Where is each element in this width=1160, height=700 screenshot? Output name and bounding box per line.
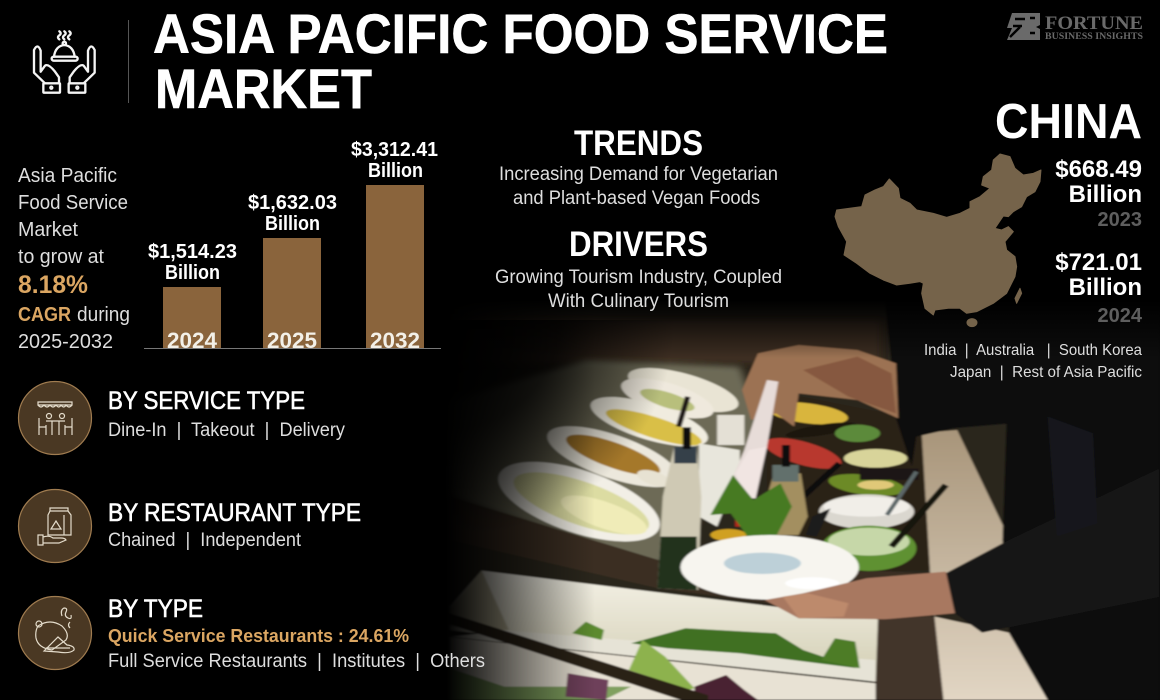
- trends and drivers: and Plant-based Vegan Foods: [513, 188, 760, 209]
- CAGR text block: to grow at: [18, 246, 104, 268]
- bar chart: [144, 139, 441, 353]
- CAGR text block: Asia Pacific: [18, 165, 117, 187]
- segment: by service type: BY SERVICE TYPE: [108, 387, 305, 415]
- logo: Fortune Business Insights: FORTUNE: [1045, 13, 1143, 34]
- other countries: Japan | Rest of Asia Pacific: [950, 364, 1142, 381]
- CAGR text block: 8.18%: [18, 271, 88, 299]
- China statistics: Billion: [1069, 274, 1142, 301]
- bar chart: $3,312.41: [351, 139, 438, 161]
- CAGR text block: Market: [18, 219, 78, 241]
- photo: salad bar buffet: [451, 311, 1160, 700]
- header icon: hands holding cloche: [34, 31, 95, 93]
- CAGR text block: during: [77, 304, 130, 326]
- bar chart: 2032: [370, 328, 420, 353]
- bar chart: $1,632.03: [248, 192, 337, 214]
- segment: by restaurant type: BY RESTAURANT TYPE: [108, 499, 361, 527]
- bar chart: $1,514.23: [148, 241, 237, 263]
- logo: Fortune Business Insights: [1007, 13, 1143, 42]
- bar chart: Billion: [265, 213, 320, 235]
- other countries: [924, 342, 1142, 381]
- logo: Fortune Business Insights: BUSINESS INSIGHTS: [1045, 32, 1143, 42]
- segment: by service type: [18, 382, 345, 454]
- China statistics: [995, 95, 1143, 327]
- title: [153, 2, 888, 120]
- bar chart: Billion: [165, 262, 220, 284]
- segment: by type: BY TYPE: [108, 595, 203, 623]
- trends and drivers: DRIVERS: [569, 225, 708, 264]
- China map: [835, 154, 1041, 327]
- China statistics: CHINA: [995, 95, 1142, 149]
- CAGR text block: 2025-2032: [18, 331, 113, 353]
- CAGR text block: CAGR: [18, 304, 71, 326]
- segment: by type: [18, 595, 485, 672]
- CAGR text block: Food Service: [18, 192, 128, 214]
- China statistics: 2023: [1098, 209, 1142, 231]
- segment: by type: Quick Service Restaurants : 24.61%: [108, 626, 409, 646]
- title: MARKET: [155, 57, 372, 120]
- segment: by restaurant type: Chained | Independent: [108, 530, 302, 551]
- trends and drivers: Increasing Demand for Vegetarian: [499, 164, 778, 185]
- China statistics: 2024: [1098, 305, 1143, 327]
- bar chart: 2024: [167, 328, 218, 353]
- trends and drivers: With Culinary Tourism: [548, 291, 729, 312]
- icon: restaurant table: [18, 382, 92, 454]
- trends and drivers: Growing Tourism Industry, Coupled: [495, 267, 782, 288]
- segment: by type: Full Service Restaurants | Institutes | Others: [108, 651, 485, 672]
- bar chart: Billion: [368, 160, 423, 182]
- icon: dish with cloche: [18, 596, 92, 670]
- other countries: India | Australia | South Korea: [924, 342, 1142, 359]
- trends and drivers: TRENDS: [574, 124, 703, 163]
- trends and drivers: [495, 124, 782, 312]
- China statistics: Billion: [1069, 181, 1142, 208]
- segment: by service type: Dine-In | Takeout | Delivery: [108, 420, 345, 441]
- segment: by restaurant type: [18, 490, 361, 562]
- icon: food bag on hand: [18, 490, 92, 562]
- bar chart: 2025: [267, 328, 317, 353]
- China statistics: $668.49: [1055, 156, 1142, 183]
- China statistics: $721.01: [1055, 249, 1142, 276]
- title: ASIA PACIFIC FOOD SERVICE: [153, 2, 888, 65]
- CAGR text block: [18, 165, 130, 353]
